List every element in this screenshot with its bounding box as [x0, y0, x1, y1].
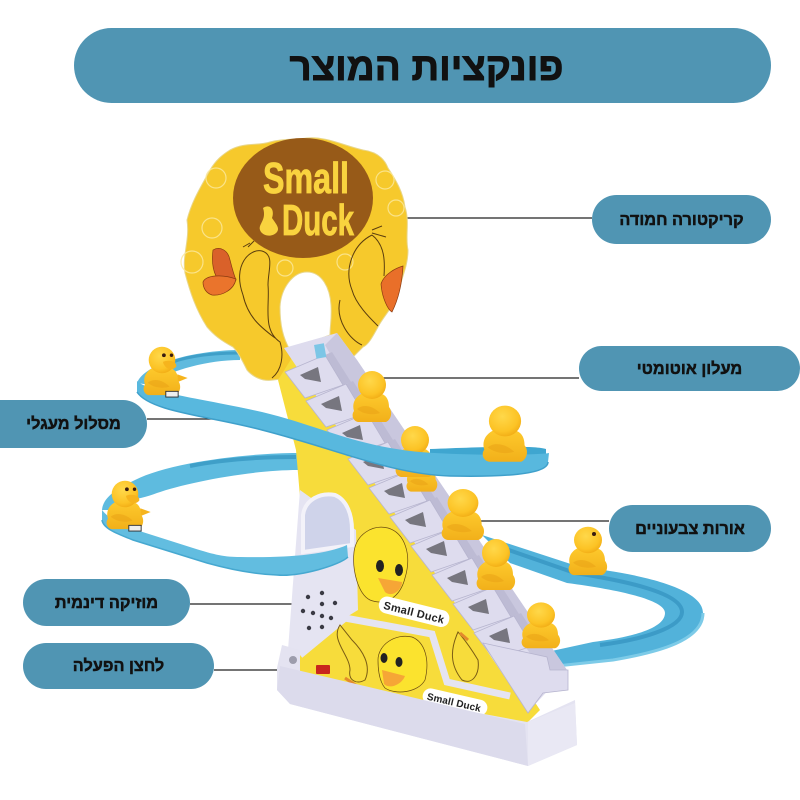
wall duck: upper [354, 527, 408, 602]
title pill: פונקציות המוצר [290, 46, 563, 88]
on/off switch [316, 665, 330, 674]
wall: lavender zigzag divider [300, 618, 510, 696]
sign text: Small: Small [263, 154, 349, 203]
label: automatic lift: מעלון אוטומטי [637, 360, 742, 378]
pale duck pattern on board [181, 168, 404, 276]
duck: stairs 1 [442, 489, 484, 540]
upper track: back strip [137, 350, 240, 385]
title pill [74, 28, 771, 103]
middle track: back strip [102, 453, 298, 510]
wall: yellow panel [278, 345, 540, 730]
wall duck: lower [378, 636, 427, 692]
stairs: bottom block [483, 643, 568, 713]
duck eye: lower track [592, 532, 596, 536]
duck: upper track right [483, 406, 527, 462]
middle track: front band [102, 510, 348, 575]
lower track [482, 535, 703, 667]
sign text: Duck: Duck [282, 196, 354, 245]
label: automatic lift [579, 346, 800, 391]
left cartoon duck [203, 241, 282, 378]
base [277, 645, 577, 766]
duck: lower track [569, 527, 607, 575]
duck: climbing upper [353, 371, 391, 422]
badge: Small Duck upper [377, 595, 451, 629]
brown oval [233, 138, 373, 258]
duck: stairs 2 [477, 539, 515, 590]
upper track: front band [137, 381, 549, 476]
stairs: steps [285, 352, 540, 659]
label: circular track: מסלול מעגלי [26, 415, 121, 433]
label: cute caricature [592, 195, 771, 244]
duck: top track [144, 347, 188, 397]
wall: speaker section with tunnel [288, 490, 358, 653]
badge: Small Duck lower: Small Duck [426, 692, 482, 715]
duck: under upper track [406, 451, 437, 492]
stairs: body band [284, 333, 567, 712]
right cartoon duck [339, 226, 403, 345]
speaker holes [301, 591, 337, 630]
leader lines [147, 218, 609, 670]
label: cute caricature: קריקטורה חמודה [619, 210, 744, 228]
label: colorful lights: אורות צבעוניים [635, 520, 745, 538]
badge: Small Duck upper: Small Duck [382, 600, 446, 627]
sign: yellow duck board [181, 138, 408, 380]
icon: small duck logo [260, 206, 278, 236]
label: colorful lights [609, 505, 771, 552]
label: circular track [0, 400, 147, 448]
duck: stairs 3 [522, 602, 560, 648]
label: dynamic music: מוזיקה דינמית [55, 594, 158, 612]
label: power button [23, 643, 214, 689]
wall duck outline: left of lower panel [337, 625, 367, 686]
label: power button: לחצן הפעלה [73, 657, 164, 675]
label: dynamic music [23, 579, 190, 626]
stairs: back lane [325, 333, 567, 680]
wall duck outline: right of lower panel [452, 632, 478, 681]
duck: climbing behind track [396, 426, 434, 477]
badge: Small Duck lower [421, 687, 489, 717]
stairs: top window [314, 343, 326, 359]
duck: middle track [107, 481, 151, 531]
